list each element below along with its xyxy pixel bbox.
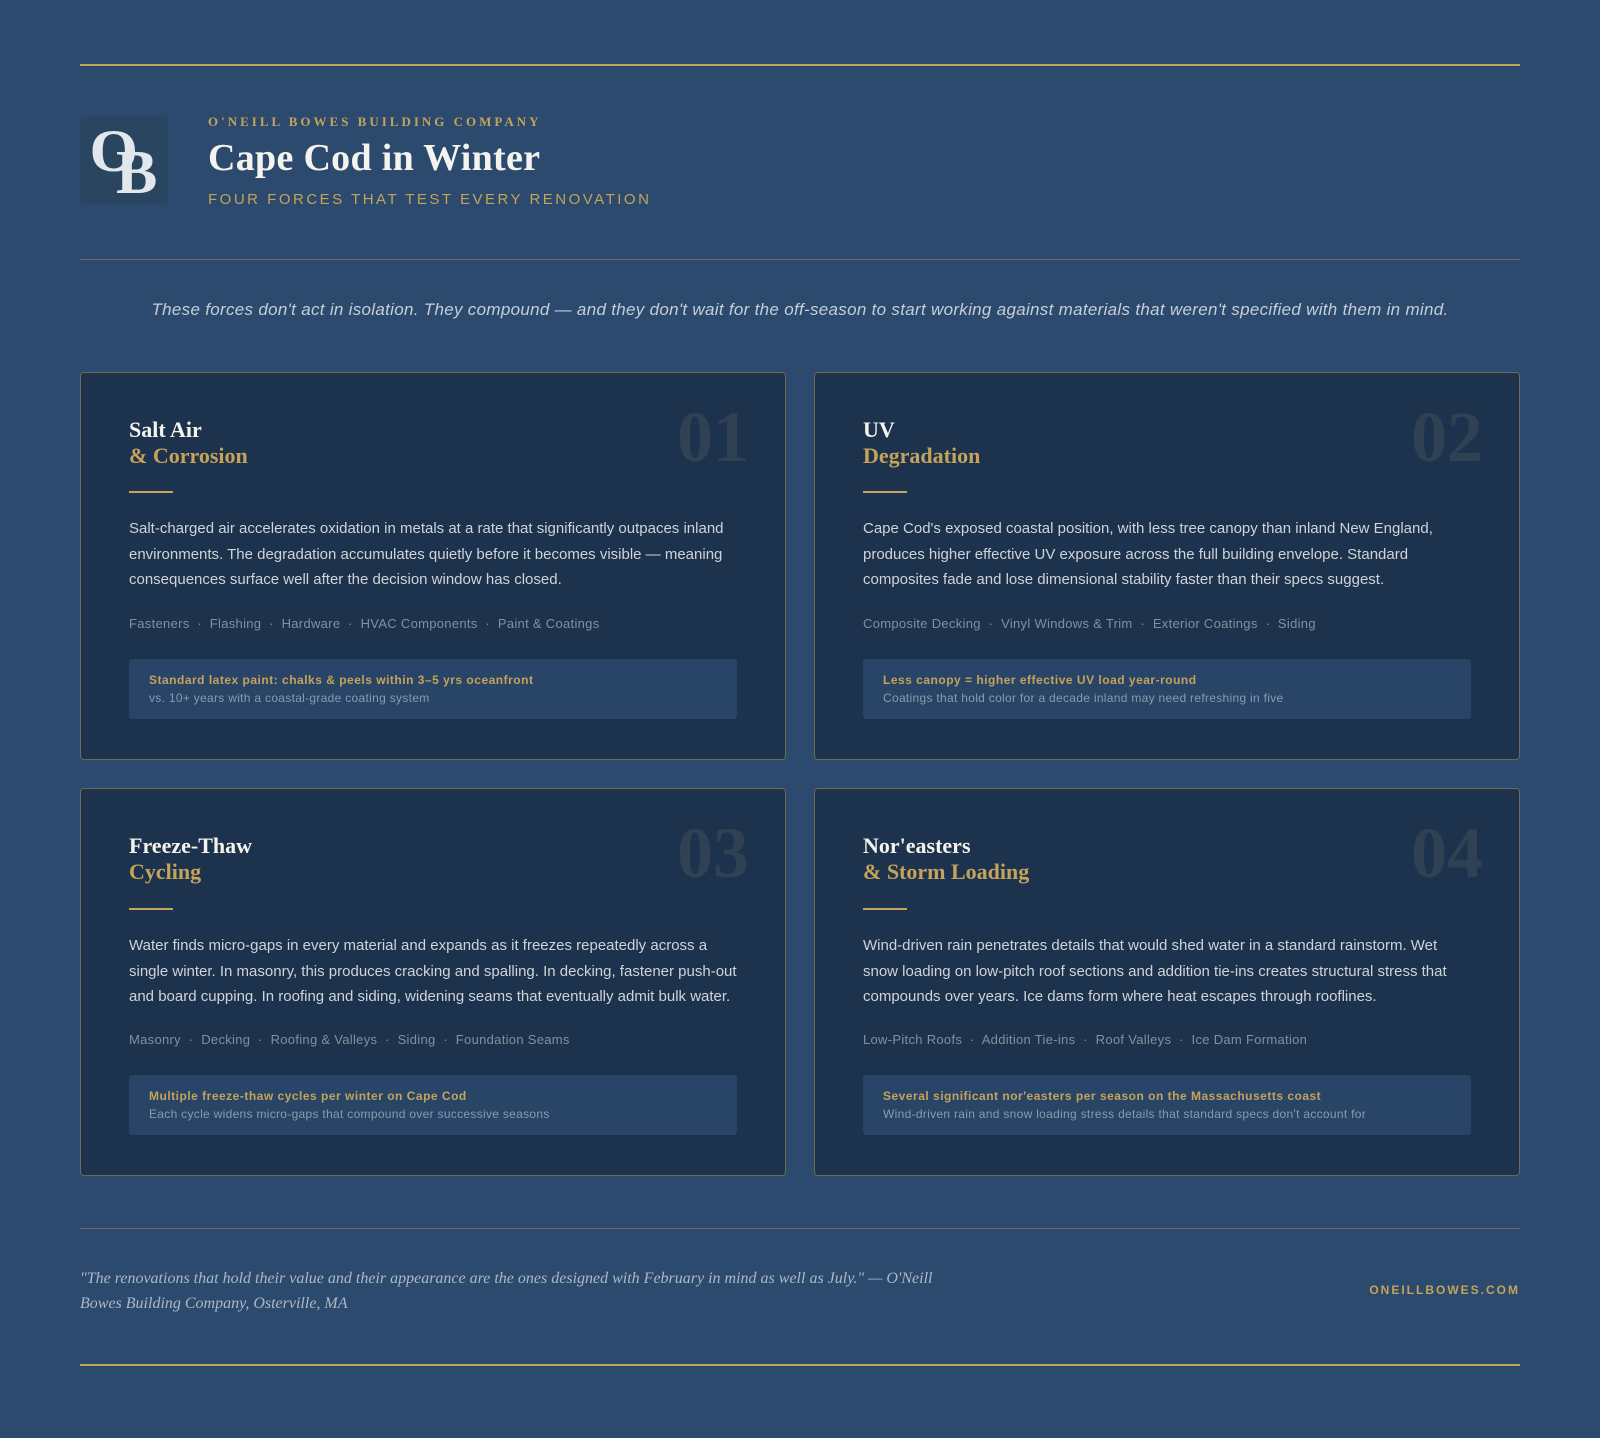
card heading: & Corrosion bbox=[129, 443, 248, 468]
card body text bbox=[863, 937, 1447, 1005]
affected items: Low-Pitch Roofs · Addition Tie-ins · Roof Valleys · Ice Dam Formation bbox=[863, 1032, 1307, 1047]
card heading bbox=[129, 417, 248, 468]
footer quote bbox=[80, 1270, 932, 1312]
header divider bbox=[80, 259, 1520, 260]
card heading: & Storm Loading bbox=[863, 859, 1029, 884]
card body text bbox=[863, 520, 1433, 588]
card body text: compounds over years. Ice dams form where heat escapes through rooflines. bbox=[863, 988, 1377, 1005]
card heading: Degradation bbox=[863, 443, 980, 468]
panel: Nor'easters bbox=[814, 788, 1520, 1176]
card heading bbox=[863, 417, 980, 468]
callout: vs. 10+ years with a coastal-grade coating system bbox=[149, 691, 430, 705]
intro statement: These forces don't act in isolation. They compound — and they don't wait for the off-season to start working against materials that weren't specified with them in mind. bbox=[151, 300, 1449, 319]
card body text bbox=[129, 520, 724, 588]
subtitle: FOUR FORCES THAT TEST EVERY RENOVATION bbox=[208, 191, 651, 208]
card body text: single winter. In masonry, this produces cracking and spalling. In decking, fastener push-out bbox=[129, 962, 737, 980]
card body text: environments. The degradation accumulates quietly before it becomes visible — meaning bbox=[129, 546, 722, 562]
card heading bbox=[129, 833, 252, 884]
card heading: Salt Air bbox=[129, 417, 202, 442]
card body text: Wind-driven rain penetrates details that would shed water in a standard rainstorm. Wet bbox=[863, 937, 1437, 954]
card body text bbox=[129, 937, 737, 1005]
icon: OB logo: O bbox=[90, 118, 138, 185]
title: Cape Cod in Winter bbox=[208, 137, 540, 179]
callout: Several significant nor'easters per season on the Massachusetts coast bbox=[883, 1089, 1321, 1103]
header text bbox=[208, 114, 651, 208]
card body text: and board cupping. In roofing and siding, widening seams that eventually admit bulk water. bbox=[129, 988, 730, 1005]
card heading: UV bbox=[863, 417, 895, 442]
panel: UV bbox=[814, 372, 1520, 760]
callout: Less canopy = higher effective UV load year-round bbox=[883, 673, 1197, 687]
card body text: Cape Cod's exposed coastal position, with less tree canopy than inland New England, bbox=[863, 520, 1433, 537]
footer quote: "The renovations that hold their value and their appearance are the ones designed with February in mind as well as July." — O'Neill bbox=[80, 1270, 932, 1287]
panel: Freeze-Thaw bbox=[80, 788, 786, 1176]
callout: Each cycle widens micro-gaps that compound over successive seasons bbox=[149, 1107, 550, 1121]
top gold rule bbox=[80, 64, 1520, 66]
card body text: composites fade and lose dimensional stability faster than their specs suggest. bbox=[863, 571, 1384, 588]
card number: 01 bbox=[677, 397, 749, 477]
panel: Salt Air bbox=[80, 372, 786, 760]
card heading: Freeze-Thaw bbox=[129, 833, 252, 858]
callout: Wind-driven rain and snow loading stress details that standard specs don't account for bbox=[883, 1107, 1366, 1121]
footer divider bbox=[80, 1228, 1520, 1229]
icon: OB logo bbox=[80, 116, 168, 204]
callout: Coatings that hold color for a decade inland may need refreshing in five bbox=[883, 691, 1284, 705]
affected items: Masonry · Decking · Roofing & Valleys · Siding · Foundation Seams bbox=[129, 1032, 570, 1047]
affected items: Composite Decking · Vinyl Windows & Trim · Exterior Coatings · Siding bbox=[863, 616, 1316, 631]
card body text: Salt-charged air accelerates oxidation in metals at a rate that significantly outpaces inland bbox=[129, 520, 724, 537]
footer website: ONEILLBOWES.COM bbox=[1369, 1283, 1520, 1297]
eyebrow: O'NEILL BOWES BUILDING COMPANY bbox=[208, 114, 542, 129]
callout bbox=[129, 659, 737, 719]
card number: 04 bbox=[1411, 813, 1483, 893]
callout bbox=[863, 659, 1471, 719]
callout bbox=[863, 1075, 1471, 1135]
footer quote: Bowes Building Company, Osterville, MA bbox=[80, 1295, 348, 1312]
card heading: Nor'easters bbox=[863, 833, 971, 858]
callout bbox=[129, 1075, 737, 1135]
callout: Standard latex paint: chalks & peels within 3–5 yrs oceanfront bbox=[149, 673, 533, 687]
card body text: consequences surface well after the decision window has closed. bbox=[129, 571, 562, 588]
card number: 03 bbox=[677, 813, 749, 893]
card heading: Cycling bbox=[129, 859, 201, 884]
card body text: Water finds micro-gaps in every material and expands as it freezes repeatedly across a bbox=[129, 937, 707, 954]
bottom gold rule bbox=[80, 1364, 1520, 1366]
card heading bbox=[863, 833, 1029, 884]
affected items: Fasteners · Flashing · Hardware · HVAC Components · Paint & Coatings bbox=[129, 616, 600, 631]
callout: Multiple freeze-thaw cycles per winter on Cape Cod bbox=[149, 1089, 467, 1103]
card body text: produces higher effective UV exposure across the full building envelope. Standard bbox=[863, 546, 1408, 562]
card body text: snow loading on low-pitch roof sections and addition tie-ins creates structural stress that bbox=[863, 962, 1447, 980]
card number: 02 bbox=[1411, 397, 1483, 477]
